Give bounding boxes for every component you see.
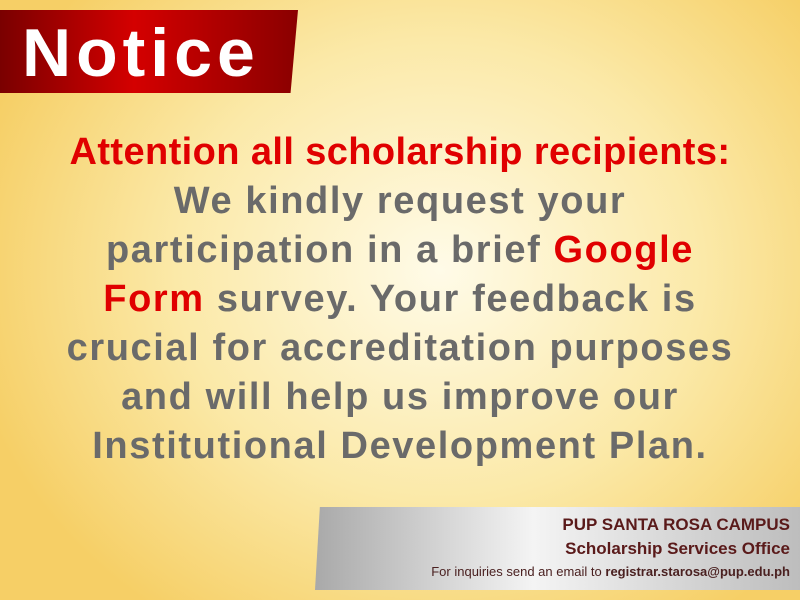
footer panel: campus contact info: Scholarship Services Office [565,539,790,558]
main message text: participation in a brief Google [106,229,694,271]
title banner: Notice: Notice [22,15,260,91]
main message text [67,131,733,467]
main message text: Institutional Development Plan. [92,425,708,467]
main message text: Form survey. Your feedback is [103,278,697,320]
main message text: Attention all scholarship recipients: [70,131,730,173]
main message text: crucial for accreditation purposes [67,327,733,369]
footer panel: campus contact info [315,507,800,590]
footer panel: campus contact info: PUP SANTA ROSA CAMPUS [562,515,790,534]
footer panel: campus contact info: For inquiries send an email to registrar.starosa@pup.edu.ph [431,564,790,579]
main message text: and will help us improve our [121,376,679,418]
main message text: We kindly request your [174,180,626,222]
